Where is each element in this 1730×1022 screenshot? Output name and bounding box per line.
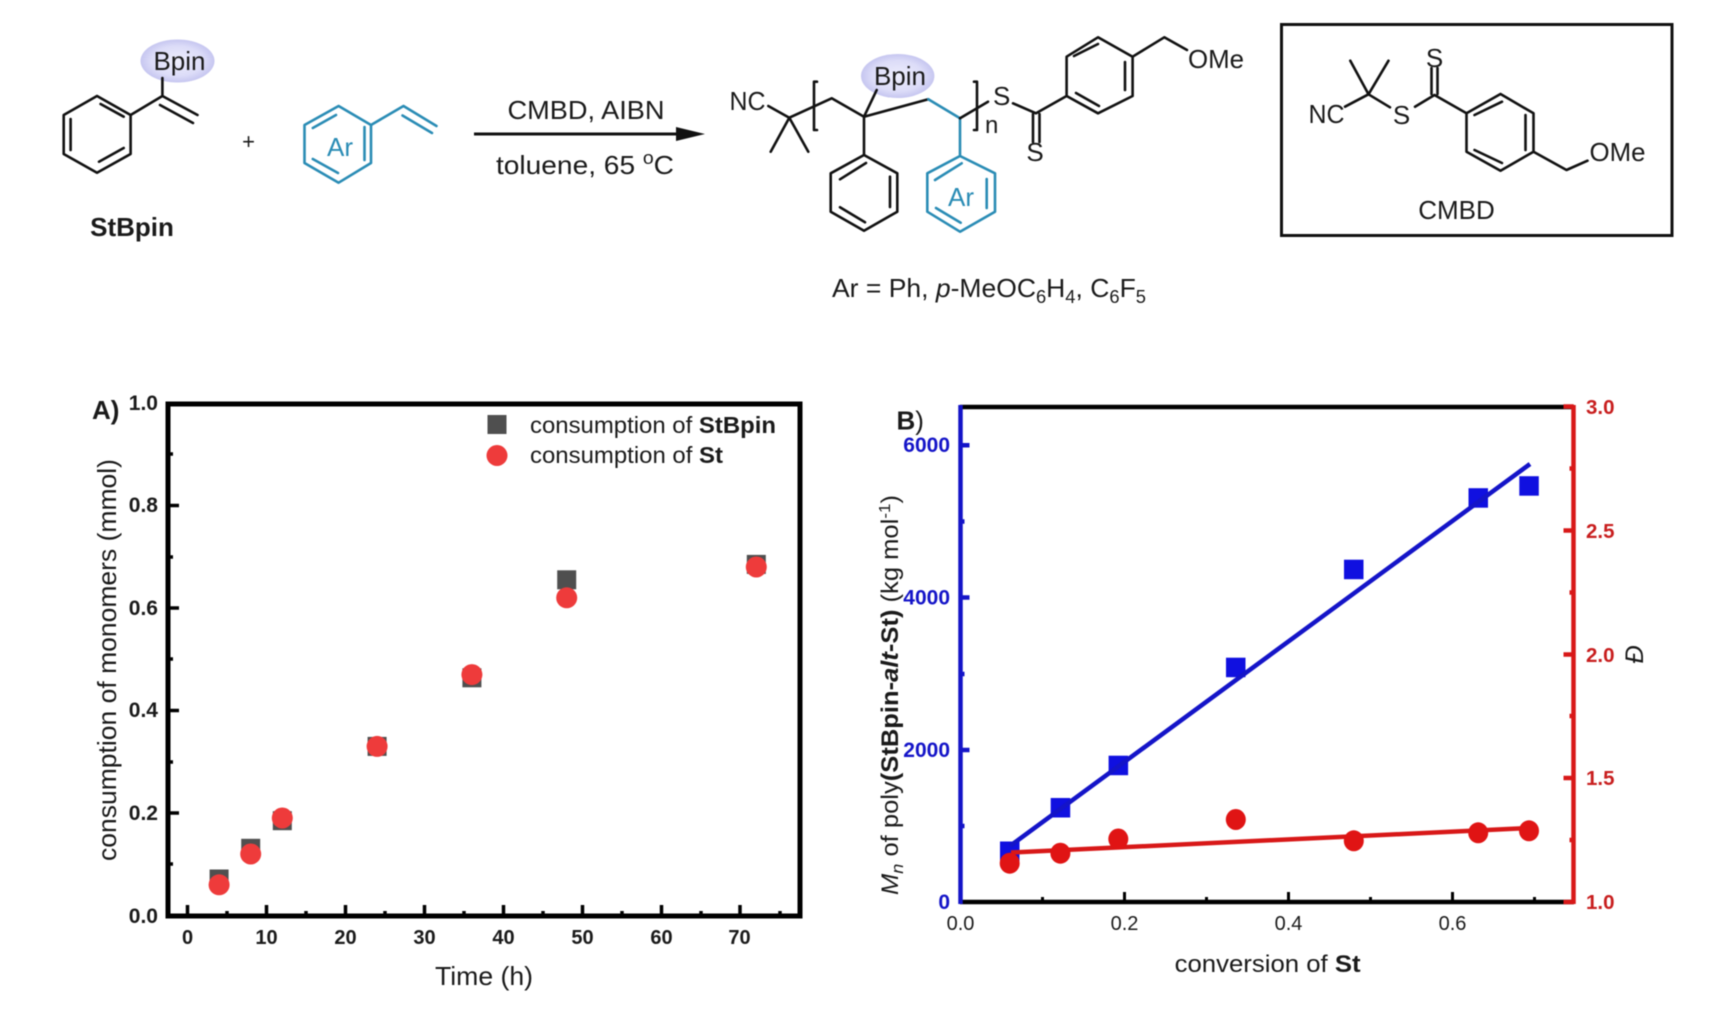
y tick labels A: 0.2 bbox=[129, 802, 158, 825]
y tick labels A: 1.0 bbox=[129, 392, 158, 415]
legend A: consumption of StBpin bbox=[530, 412, 776, 438]
y tick labels A: 0.4 bbox=[129, 699, 158, 722]
Ar substituents caption: 6 bbox=[1036, 287, 1046, 307]
right tick labels B: 1.5 bbox=[1586, 767, 1614, 790]
chart A: consumption of monomers vs time bbox=[92, 392, 800, 991]
left tick labels B: 6000 bbox=[903, 434, 950, 457]
CMBD boxed structure: CMBD bbox=[1418, 195, 1495, 225]
monomer: StBpin structure bbox=[64, 40, 215, 242]
Ar substituents caption: Ar = Ph, p-MeOC bbox=[832, 273, 1034, 303]
Ar substituents caption: F bbox=[1120, 273, 1136, 303]
brackets bbox=[814, 82, 977, 130]
right axis title B: Đ bbox=[1621, 645, 1649, 664]
Ar substituents caption: 4 bbox=[1065, 287, 1076, 307]
x axis title B: conversion of St bbox=[1175, 951, 1361, 978]
product polymer structure: S bbox=[993, 81, 1010, 111]
right tick labels B: 2.5 bbox=[1586, 520, 1614, 543]
product polymer structure: Ar bbox=[948, 182, 974, 212]
data series St bbox=[209, 556, 767, 895]
x tick labels B: 0.4 bbox=[1275, 913, 1302, 935]
left axis title B: ) bbox=[877, 495, 904, 504]
reaction arrow with conditions: CMBD, AIBN bbox=[508, 95, 664, 125]
legend A: consumption of St bbox=[530, 442, 723, 468]
x axis title A: Time (h) bbox=[435, 961, 533, 991]
data series Mn bbox=[1000, 476, 1539, 861]
x tick labels A: 0 bbox=[182, 927, 193, 949]
left tick labels B bbox=[903, 434, 950, 914]
fit line Mn bbox=[1010, 464, 1530, 846]
top and bottom axes B bbox=[960, 407, 1574, 902]
reaction arrow with conditions: C bbox=[654, 150, 674, 180]
Ar substituents caption: 5 bbox=[1136, 287, 1146, 307]
right tick labels B: 1.0 bbox=[1586, 891, 1614, 914]
left axis title B: M bbox=[877, 874, 904, 895]
right tick labels B: 2.0 bbox=[1586, 644, 1614, 667]
product polymer structure: OMe bbox=[1188, 44, 1244, 74]
right tick labels B bbox=[1586, 396, 1614, 914]
left axis title B: (StBpin-alt-St) (kg mol bbox=[877, 524, 904, 781]
reaction arrow with conditions: toluene, 65 bbox=[496, 150, 625, 180]
x tick labels A: 10 bbox=[255, 927, 278, 949]
left axis title B: n bbox=[888, 864, 907, 874]
monomer: StBpin structure: Bpin bbox=[153, 46, 206, 76]
x tick labels A: 50 bbox=[571, 927, 594, 949]
monomer: blue aryl styrene bbox=[304, 106, 436, 183]
product polymer structure: n bbox=[985, 112, 998, 139]
x ticks B bbox=[1042, 892, 1534, 902]
data series dispersity bbox=[1000, 809, 1539, 874]
plus sign: + bbox=[242, 129, 255, 154]
right axis B bbox=[1564, 405, 1574, 904]
x tick labels A: 60 bbox=[650, 927, 673, 949]
x tick labels A: 30 bbox=[413, 927, 436, 949]
x tick labels B: 0.0 bbox=[947, 913, 974, 935]
ticks A bbox=[168, 454, 780, 916]
y tick labels A bbox=[129, 392, 158, 928]
Ar substituents caption: 6 bbox=[1109, 287, 1120, 307]
right tick labels B: 3.0 bbox=[1586, 396, 1614, 419]
x tick labels B bbox=[947, 913, 1466, 935]
left tick labels B: 2000 bbox=[903, 739, 950, 762]
x tick labels B: 0.6 bbox=[1439, 913, 1466, 935]
product polymer structure: NC bbox=[730, 86, 766, 116]
CMBD boxed structure: NC bbox=[1308, 99, 1344, 129]
x tick labels A: 40 bbox=[492, 927, 515, 949]
x tick labels B: 0.2 bbox=[1111, 913, 1138, 935]
left axis title B: -1 bbox=[877, 503, 894, 519]
chart B: Mn and dispersity vs conversion bbox=[877, 396, 1649, 978]
monomer: StBpin structure: StBpin bbox=[90, 212, 174, 242]
x tick labels A: 20 bbox=[334, 927, 357, 949]
monomer: blue aryl styrene: Ar bbox=[327, 132, 353, 162]
product polymer structure: S bbox=[1026, 137, 1044, 167]
y tick labels A: 0.0 bbox=[129, 905, 158, 928]
left tick labels B: 0 bbox=[938, 891, 950, 914]
y tick labels A: 0.8 bbox=[129, 494, 158, 517]
legend A bbox=[486, 412, 776, 468]
CMBD boxed structure: S bbox=[1393, 100, 1410, 130]
fit line dispersity bbox=[1011, 828, 1530, 852]
CMBD boxed structure: OMe bbox=[1590, 137, 1646, 167]
product polymer structure: Bpin bbox=[874, 61, 926, 91]
product polymer structure bbox=[730, 37, 1244, 232]
Ar substituents caption: H bbox=[1046, 273, 1065, 303]
y tick labels A: 0.6 bbox=[129, 597, 158, 620]
reaction arrow with conditions: o bbox=[643, 148, 654, 168]
CMBD boxed structure: S bbox=[1426, 43, 1443, 73]
x tick labels A bbox=[182, 927, 751, 949]
Ar substituents caption: , C bbox=[1076, 273, 1109, 303]
left tick labels B: 4000 bbox=[903, 586, 950, 610]
data series StBpin bbox=[210, 555, 766, 888]
panel label A: A) bbox=[92, 395, 119, 425]
plot frame A bbox=[168, 404, 800, 916]
x tick labels A: 70 bbox=[728, 927, 751, 949]
y axis title A: consumption of monomers (mmol) bbox=[92, 459, 122, 861]
panel label B: B) bbox=[896, 406, 924, 436]
left axis B bbox=[960, 405, 970, 904]
CMBD boxed structure bbox=[1282, 24, 1672, 236]
reaction arrow with conditions bbox=[474, 95, 705, 180]
left axis title B: of poly bbox=[877, 781, 904, 864]
